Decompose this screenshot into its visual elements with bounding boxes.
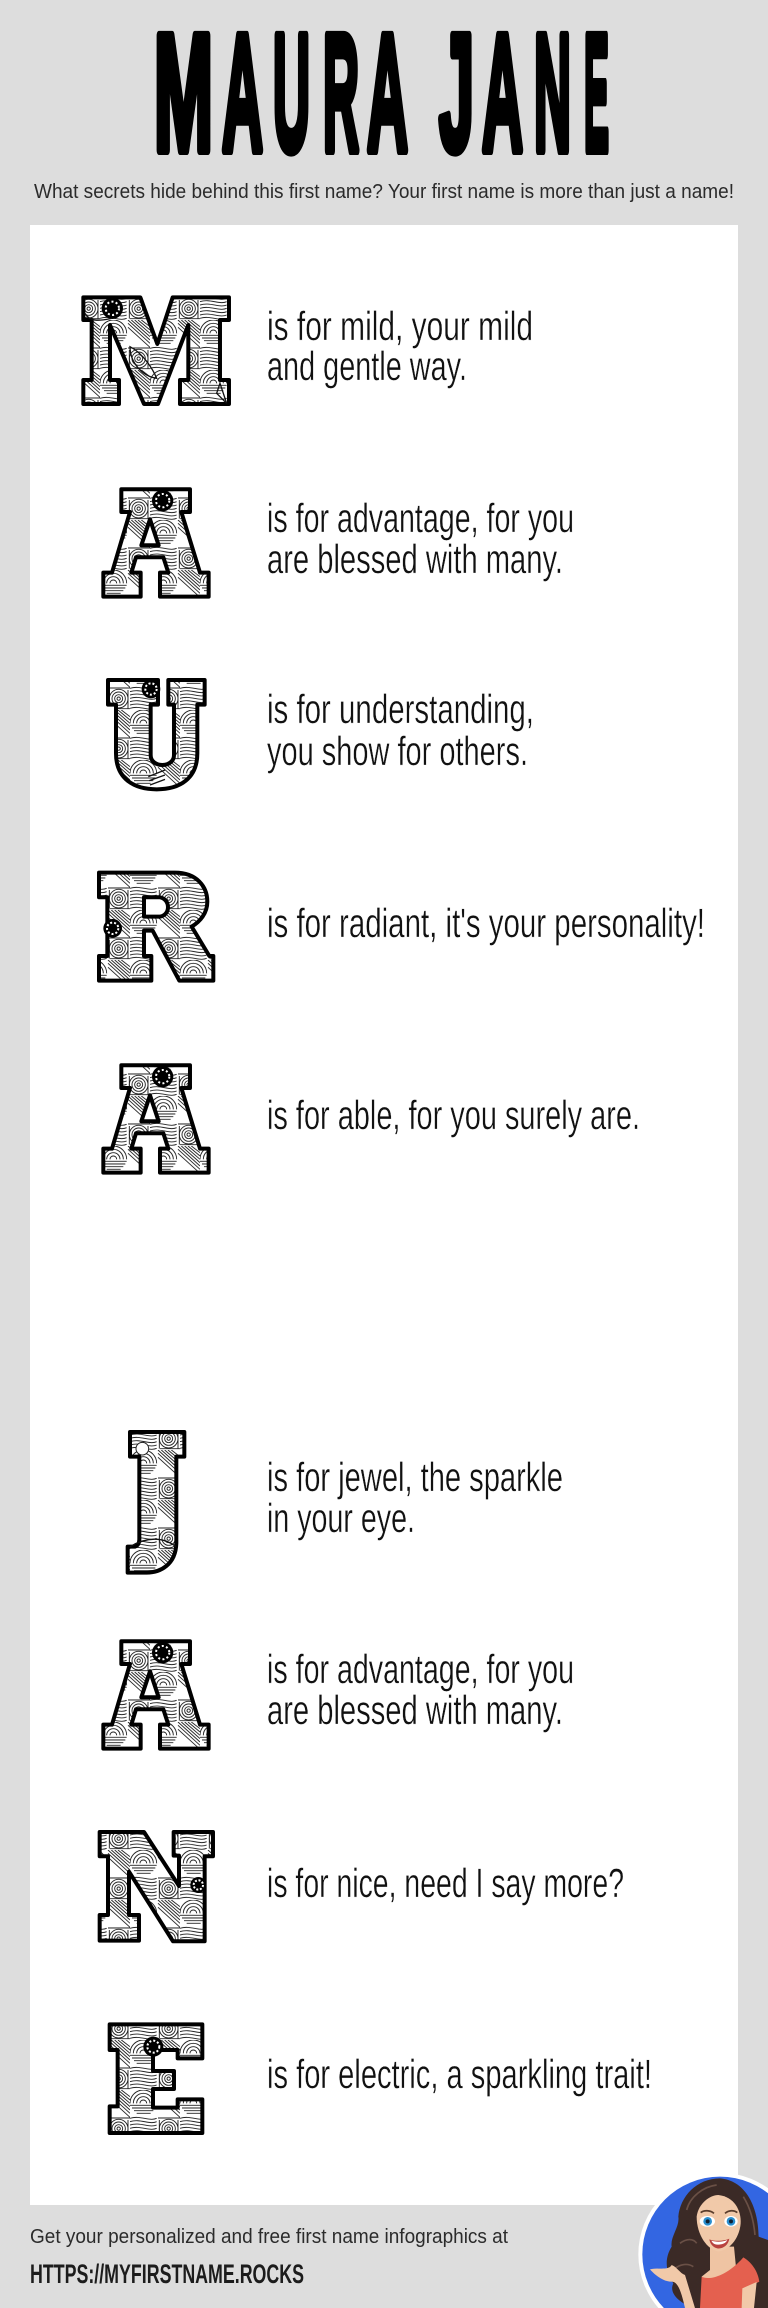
text: J line 1: is for jewel, the sparkle bbox=[267, 1454, 563, 1500]
row: R bbox=[99, 873, 705, 981]
icon: letter E bbox=[110, 2024, 202, 2133]
footer url: HTTPS://MYFIRSTNAME.ROCKS bbox=[30, 2259, 304, 2289]
text: A third line 2: are blessed with many. bbox=[267, 1687, 563, 1733]
title: J bbox=[439, 1, 474, 186]
icon: letter A second bbox=[103, 1065, 209, 1173]
text: J line 2: in your eye. bbox=[267, 1495, 415, 1541]
icon: letter R bbox=[99, 873, 213, 981]
icon: letter A bbox=[103, 489, 209, 597]
title: R bbox=[323, 1, 359, 186]
title: A bbox=[482, 1, 523, 186]
title: M bbox=[154, 1, 213, 186]
text: A third line 1: is for advantage, for you bbox=[267, 1646, 574, 1692]
panel: letters bbox=[30, 225, 738, 2205]
title: A bbox=[367, 1, 408, 186]
icon: letter J bbox=[128, 1432, 184, 1573]
title: U bbox=[273, 1, 310, 186]
row: E bbox=[110, 2024, 652, 2133]
row: A bbox=[103, 489, 574, 597]
text: M line 2: and gentle way. bbox=[267, 343, 467, 389]
icon: letter A third bbox=[103, 1641, 209, 1749]
text: E bbox=[584, 1, 609, 186]
icon: letter U bbox=[108, 680, 205, 789]
subtitle: What secrets hide behind this first name? Your first name is more than just a name! bbox=[34, 181, 734, 203]
icon: letter N bbox=[100, 1832, 213, 1941]
text: U line 2: you show for others. bbox=[267, 728, 528, 774]
row: A second bbox=[103, 1065, 640, 1173]
text: A line 2: are blessed with many. bbox=[267, 536, 563, 582]
title: A bbox=[222, 1, 263, 186]
text: U line 1: is for understanding, bbox=[267, 686, 534, 732]
row: A third bbox=[103, 1641, 574, 1749]
title: N bbox=[534, 1, 571, 186]
footer text: Get your personalized and free first name infographics at bbox=[30, 2226, 508, 2248]
icon: letter M bbox=[83, 297, 229, 404]
text: N: is for nice, need I say more? bbox=[267, 1860, 624, 1906]
row: M bbox=[83, 297, 533, 404]
row: U bbox=[108, 680, 534, 789]
text: A line 1: is for advantage, for you bbox=[267, 495, 574, 541]
icon: avatar bbox=[638, 2173, 768, 2308]
row: N bbox=[100, 1832, 624, 1941]
text: M line 1: is for mild, your mild bbox=[267, 303, 533, 349]
row: J bbox=[128, 1432, 563, 1573]
